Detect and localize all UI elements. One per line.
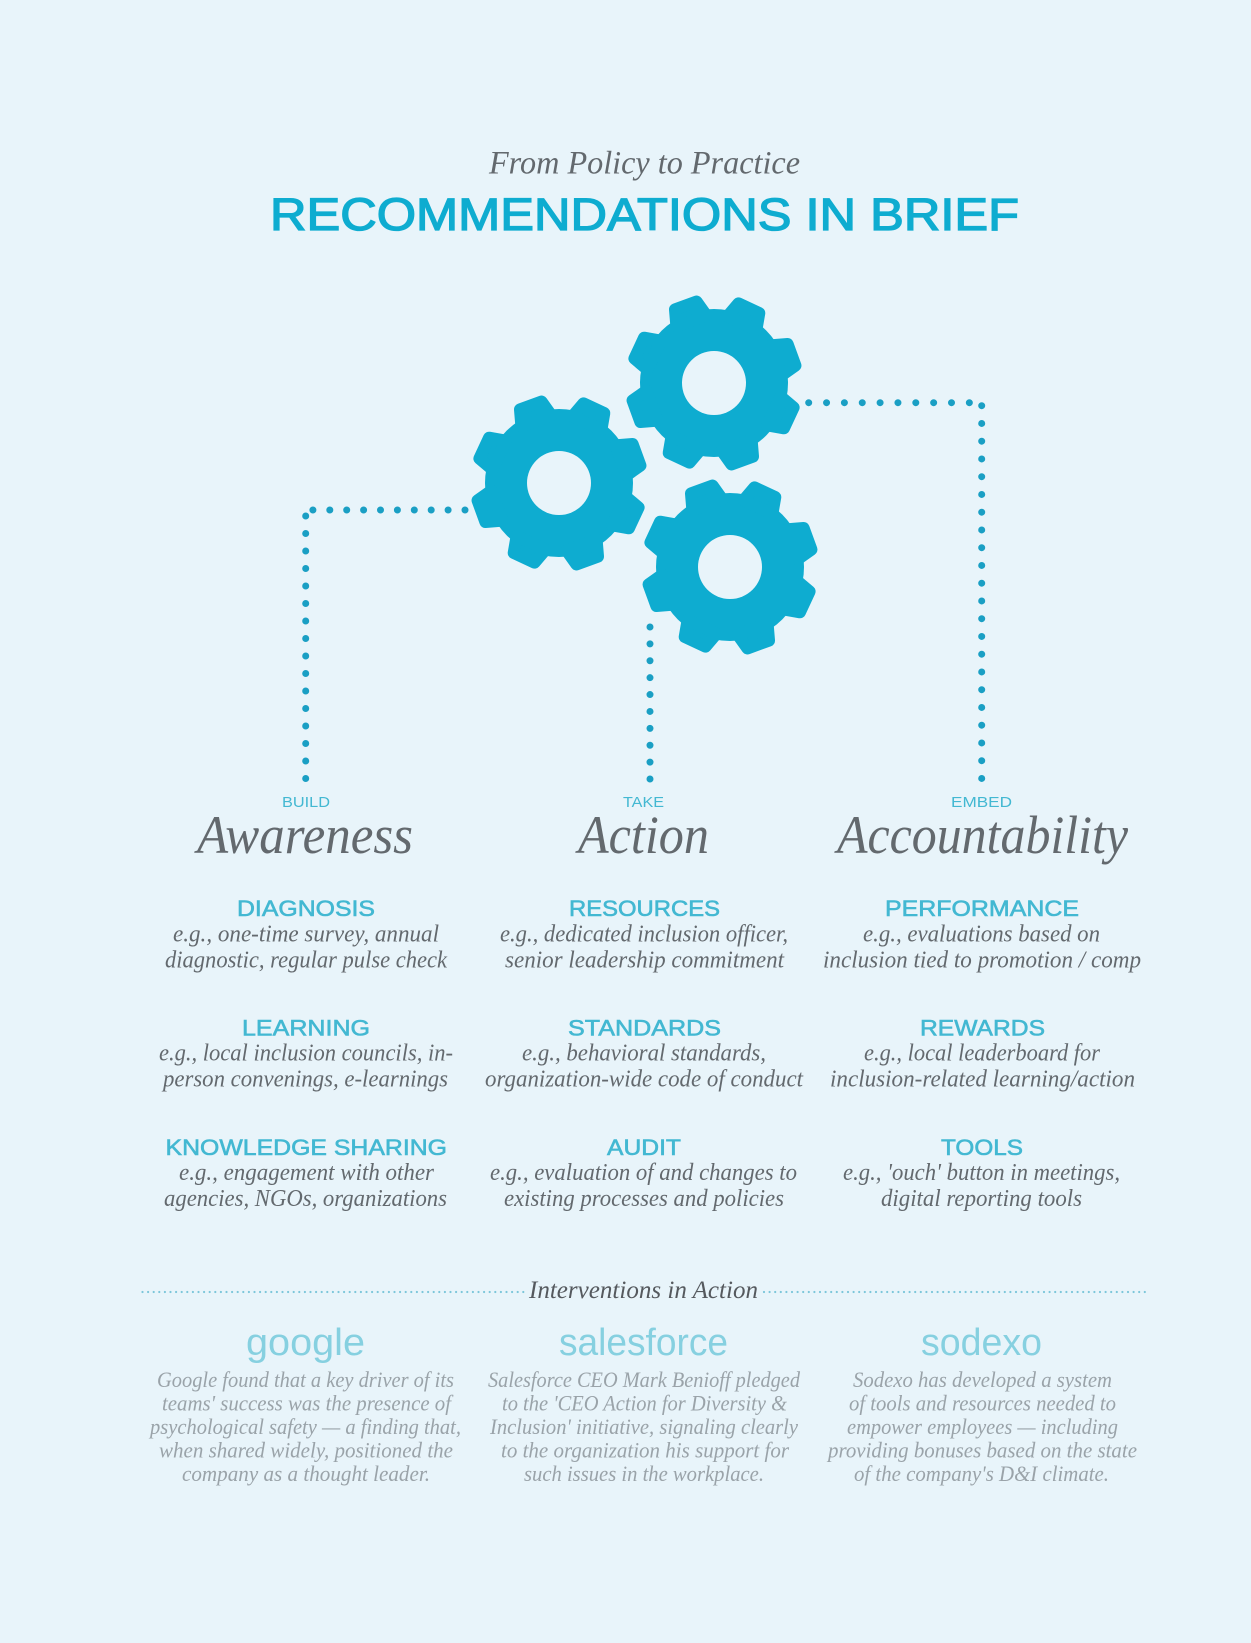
item: knowledge sharing (164, 1135, 447, 1212)
description: sodexo: of the company's D&I climate. (854, 1461, 1109, 1486)
item: performance: PERFORMANCE (885, 896, 1079, 921)
description: google: psychological safety — a finding that, (148, 1414, 461, 1439)
item: standards: organization-wide code of conduct (485, 1066, 804, 1092)
item: diagnosis: diagnostic, regular pulse check (165, 948, 447, 974)
item: performance (823, 896, 1141, 974)
panel: take action (485, 794, 804, 1212)
description: google: company as a thought leader. (182, 1461, 430, 1486)
item: rewards (830, 1016, 1135, 1092)
company name: google: google (246, 1322, 365, 1364)
item: audit (490, 1135, 797, 1212)
item: resources: RESOURCES (569, 896, 720, 921)
panel: build awareness (159, 794, 453, 1212)
item: standards: e.g., behavioral standards, (522, 1040, 766, 1066)
item: audit: existing processes and policies (504, 1186, 784, 1212)
description: sodexo (826, 1367, 1137, 1486)
panel: sodexo example (826, 1322, 1137, 1486)
company name: salesforce: salesforce (559, 1322, 728, 1364)
description: salesforce: Salesforce CEO Mark Benioff pledged (488, 1367, 801, 1392)
dotted connector: awareness gear to column (306, 510, 465, 780)
item: diagnosis (165, 896, 447, 974)
description: salesforce: to the 'CEO Action for Diversity & (502, 1390, 788, 1416)
item: resources: e.g., dedicated inclusion officer, (500, 922, 788, 948)
item: rewards: e.g., local leaderboard for (864, 1040, 1101, 1066)
pillar label: take: TAKE (623, 794, 664, 811)
item: tools (843, 1135, 1120, 1212)
description: sodexo: Sodexo has developed a system (853, 1367, 1112, 1392)
section divider: interventions in action: Interventions in Action (528, 1277, 758, 1304)
item: learning: e.g., local inclusion councils, in- (159, 1040, 453, 1066)
description: google: teams' success was the presence of (162, 1390, 454, 1416)
panel: salesforce example (488, 1322, 801, 1486)
description: google: when shared widely, positioned the (159, 1438, 453, 1462)
icon: three interlocking gears (476, 300, 813, 650)
item: knowledge sharing: KNOWLEDGE SHARING (166, 1135, 447, 1160)
item: learning: LEARNING (242, 1016, 370, 1040)
item: diagnosis: e.g., one-time survey, annual (173, 922, 439, 948)
item: standards (485, 1016, 804, 1092)
item: learning (159, 1016, 453, 1092)
description: sodexo: providing bonuses based on the state (826, 1438, 1137, 1462)
item: performance: inclusion tied to promotion / comp (823, 948, 1141, 974)
description: sodexo: of tools and resources needed to (849, 1390, 1116, 1416)
dotted connector: accountability gear to column (809, 403, 982, 780)
item: standards: STANDARDS (568, 1016, 721, 1040)
description: salesforce: to the organization his support for (501, 1438, 789, 1462)
item: knowledge sharing: e.g., engagement with other (179, 1160, 435, 1186)
description: sodexo: empower employees — including (847, 1414, 1118, 1439)
subtitle: From Policy to Practice (488, 146, 800, 182)
company name: sodexo: sodexo (921, 1322, 1042, 1364)
item: rewards: REWARDS (920, 1016, 1045, 1040)
item: learning: person convenings, e-learnings (161, 1066, 448, 1092)
pillar heading: accountability: Accountability (834, 805, 1128, 865)
pillar heading: awareness: Awareness (194, 805, 413, 865)
panel: google example (148, 1322, 461, 1486)
pillar label: build: BUILD (282, 794, 330, 811)
pillar heading: action: Action (575, 805, 709, 865)
description: google: Google found that a key driver of its (157, 1367, 454, 1392)
item: knowledge sharing: agencies, NGOs, organizations (164, 1186, 447, 1212)
item: resources (500, 896, 788, 974)
description: google (148, 1367, 461, 1486)
item: tools: TOOLS (941, 1135, 1023, 1160)
pillar label: embed: EMBED (951, 794, 1012, 811)
description: salesforce: such issues in the workplace. (524, 1461, 764, 1486)
item: tools: digital reporting tools (881, 1186, 1082, 1212)
dotted connector: action gear to column (646, 627, 654, 781)
item: resources: senior leadership commitment (505, 948, 785, 974)
description: salesforce (488, 1367, 801, 1486)
heading block (270, 146, 1019, 240)
item: audit: AUDIT (607, 1135, 681, 1160)
panel: embed accountability (823, 794, 1141, 1212)
description: salesforce: Inclusion' initiative, signaling clearly (489, 1414, 798, 1439)
title: RECOMMENDATIONS IN BRIEF (270, 189, 1019, 240)
item: tools: e.g., 'ouch' button in meetings, (843, 1160, 1120, 1186)
item: rewards: inclusion-related learning/action (830, 1066, 1135, 1092)
item: audit: e.g., evaluation of and changes to (490, 1160, 797, 1186)
item: performance: e.g., evaluations based on (863, 922, 1100, 948)
item: diagnosis: DIAGNOSIS (237, 896, 375, 921)
